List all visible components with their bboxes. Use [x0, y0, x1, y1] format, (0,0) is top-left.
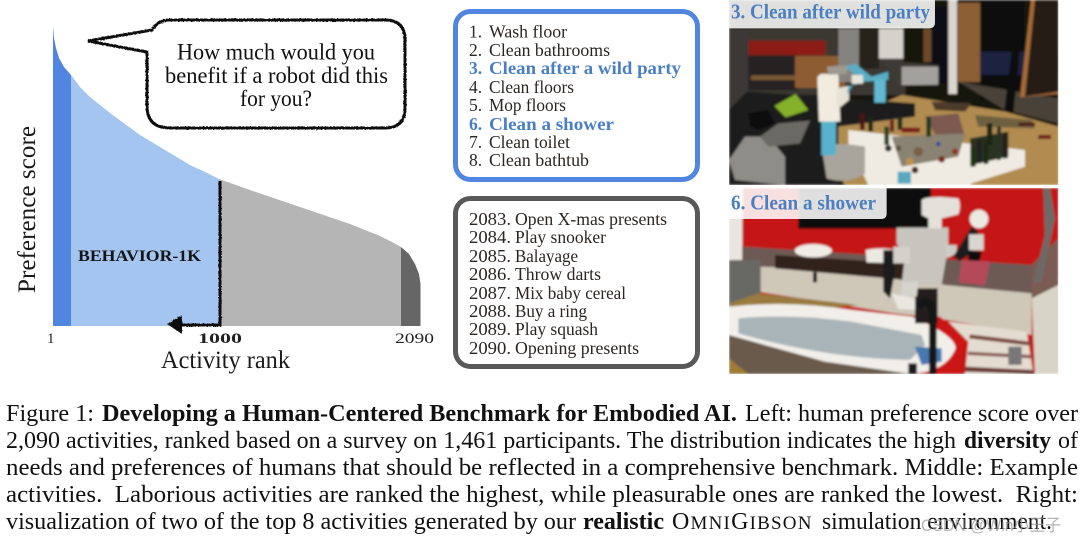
panel: top activities list — [456, 12, 698, 180]
panel: bottom activities list: 2087. — [469, 283, 511, 303]
panel: preference score chart — [14, 26, 434, 374]
watermark: CSDN @Win小王子 — [921, 516, 1061, 535]
panel: top activities list: Clean a shower — [489, 114, 614, 134]
callout: survey question — [88, 20, 405, 128]
panel: top activities list: Clean bathrooms — [489, 40, 610, 60]
panel: bottom activities list: Buy a ring — [515, 301, 587, 321]
text block: figure caption: 2,090 activities, ranked based on a survey on 1,461 participants. The distribution indicates the high — [6, 428, 956, 454]
panel: top activities list: Wash floor — [489, 22, 567, 42]
arrow: top 1000 cutoff — [167, 181, 220, 334]
text block: figure caption: activities. Laborious activities are ranked the highest, while pleasurable ones are ranked the lowest. Right: — [6, 482, 1078, 508]
area: lowest ranked activities — [401, 247, 420, 326]
panel: top activities list: 2. — [469, 40, 482, 60]
label: BEHAVIOR-1K: BEHAVIOR-1K — [78, 248, 202, 265]
text block: figure caption: needs and preferences of humans that should be reflected in a comprehensive benchmark. Middle: Example — [6, 455, 1078, 481]
text block: figure caption: Figure 1: — [6, 401, 94, 427]
text block: figure caption: diversity — [964, 428, 1051, 454]
panel: top activities list: Clean floors — [489, 77, 574, 97]
text block: figure caption: Left: human preference score over — [745, 401, 1078, 427]
panel: top activities list: Clean bathtub — [489, 150, 589, 170]
panel: bottom activities list: 2085. — [469, 246, 511, 266]
area: remaining activities — [219, 179, 401, 326]
y axis title: Preference score — [14, 126, 41, 293]
panel: top activities list: 5. — [469, 95, 482, 115]
panel: top activities list: 7. — [469, 132, 482, 152]
callout: survey question: benefit if a robot did this — [165, 63, 388, 88]
panel: top activities list: 1. — [469, 22, 482, 42]
label: clean after wild party — [729, 0, 935, 28]
text block: figure caption: visualization of two of the top 8 activities generated by our — [6, 509, 576, 535]
label: clean a shower — [729, 188, 887, 219]
panel: top activities list: 3. — [469, 58, 482, 78]
panel: top activities list: 8. — [469, 150, 482, 170]
x axis tick: 2090: 2090 — [395, 331, 434, 347]
panel: top activities list: Clean after a wild party — [489, 58, 681, 78]
area: top ranked activities — [53, 26, 71, 326]
text block: figure caption: OMNIGIBSON — [672, 509, 813, 535]
text block: figure caption: simulation environment. — [822, 509, 1052, 535]
panel: bottom activities list: 2089. — [469, 319, 511, 339]
panel: bottom activities list: Opening presents — [515, 338, 639, 358]
panel: bottom activities list: Throw darts — [515, 264, 601, 284]
panel: bottom activities list: 2090. — [469, 338, 511, 358]
callout: survey question: How much would you — [177, 40, 375, 64]
panel: bottom activities list: Open X-mas presents — [515, 209, 667, 229]
x axis title: Activity rank — [161, 347, 290, 374]
panel: bottom activities list: 2086. — [469, 264, 511, 284]
image: robot cleaning after a wild party: 3. Clean after wild party — [731, 0, 930, 24]
panel: top activities list: Clean toilet — [489, 132, 570, 152]
text block: figure caption — [6, 401, 1078, 535]
text block: figure caption: of — [1058, 428, 1078, 454]
image: robot cleaning a shower: 6. Clean a shower — [731, 190, 876, 214]
callout: survey question: for you? — [240, 86, 312, 111]
text block: figure caption: Developing a Human-Centered Benchmark for Embodied AI. — [102, 401, 737, 427]
panel: bottom activities list: Play squash — [515, 319, 598, 339]
x axis tick: 1: 1 — [47, 331, 54, 347]
panel: bottom activities list: Balayage — [515, 246, 578, 266]
panel: bottom activities list: 2084. — [469, 227, 511, 247]
panel: bottom activities list: 2088. — [469, 301, 511, 321]
panel: bottom activities list: Mix baby cereal — [515, 283, 626, 303]
area: BEHAVIOR-1K activities — [71, 75, 219, 326]
x axis tick: 1000: 1000 — [198, 331, 242, 347]
panel: top activities list: 4. — [469, 77, 482, 97]
panel: bottom activities list — [456, 198, 698, 366]
panel: top activities list: 6. — [469, 114, 482, 134]
panel: bottom activities list: 2083. — [469, 209, 511, 229]
image: robot cleaning after a wild party — [729, 0, 1058, 185]
text block: figure caption: realistic — [583, 509, 664, 535]
panel: bottom activities list: Play snooker — [515, 227, 606, 247]
panel: top activities list: Mop floors — [489, 95, 566, 115]
image: robot cleaning a shower — [729, 188, 1058, 374]
